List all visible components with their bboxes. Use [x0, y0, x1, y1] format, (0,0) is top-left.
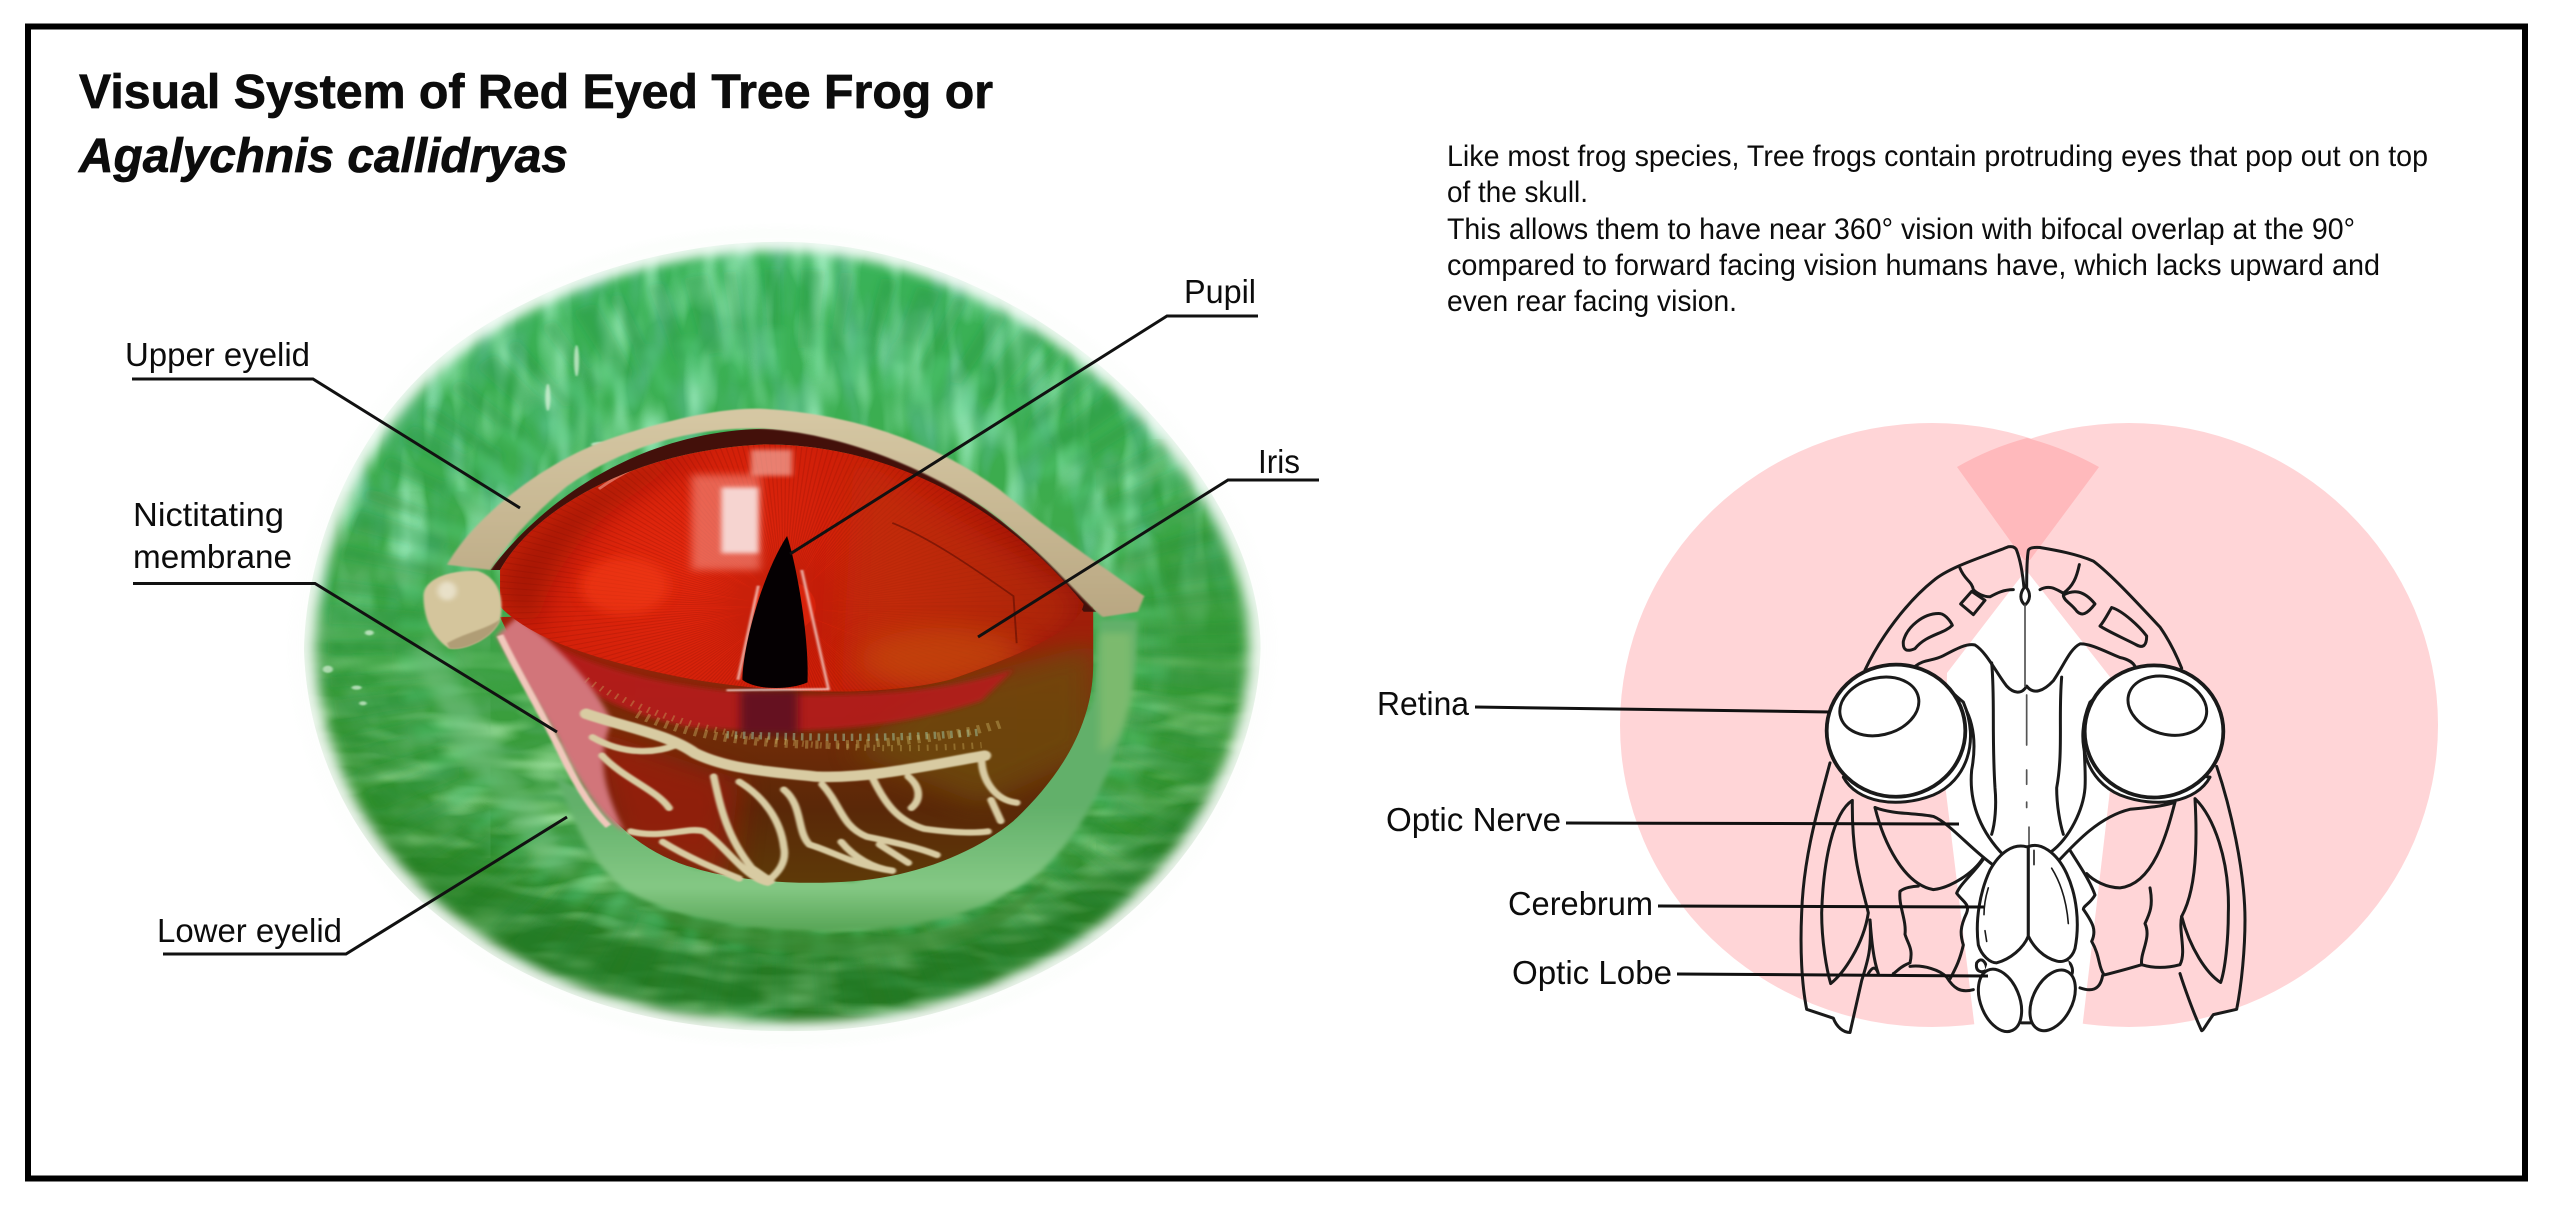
iris	[500, 444, 1084, 692]
feathered edge	[302, 240, 1263, 1033]
retinal veins on membrane	[586, 714, 1017, 883]
description paragraph: Like most frog species, Tree frogs contain protruding eyes that pop out on top	[1447, 140, 2428, 173]
darker lower skin	[372, 778, 1216, 1022]
label: Lower eyelid: Lower eyelid	[157, 912, 342, 949]
left eyeball	[1827, 665, 1971, 802]
frog skull linework	[1801, 547, 2245, 1039]
label: Cerebrum: Cerebrum	[1508, 885, 1653, 922]
binocular overlap cone	[1957, 438, 2099, 560]
nictitating membrane	[497, 617, 624, 831]
field of view: left and right eye	[1620, 423, 2438, 1027]
label: Optic Nerve: Optic Nerve	[1386, 801, 1561, 838]
label: Iris	[978, 443, 1319, 637]
description paragraph: compared to forward facing vision humans have, which lacks upward and	[1447, 249, 2380, 282]
lid corner knob	[424, 571, 502, 649]
label: Pupil	[790, 273, 1258, 554]
lower chamber	[500, 607, 1096, 884]
label: Iris: Iris	[1258, 443, 1300, 480]
illustration: frog eye	[280, 230, 1300, 1050]
label: Nictitating membrane: Nictitating	[133, 496, 284, 533]
soft halo	[299, 234, 1265, 1039]
label: Upper eyelid	[125, 336, 520, 508]
lower eyelid	[554, 620, 1138, 957]
brain: cerebrum	[1976, 845, 2077, 1024]
shadow under upper lid	[490, 429, 1096, 612]
right eyeball	[2083, 665, 2223, 802]
description paragraph: even rear facing vision.	[1447, 285, 1737, 318]
label: Retina: Retina	[1377, 685, 1470, 722]
label: Optic Lobe: Optic Lobe	[1512, 954, 1672, 991]
label: Nictitating membrane: membrane	[133, 538, 292, 575]
description paragraph	[1447, 140, 2428, 318]
brain: optic lobes	[1970, 962, 2085, 1039]
description paragraph: This allows them to have near 360° vision with bifocal overlap at the 90°	[1447, 213, 2355, 246]
label: Lower eyelid	[157, 817, 567, 954]
label: Retina	[1377, 685, 1830, 722]
label: Pupil: Pupil	[1184, 273, 1256, 310]
title: Visual System of Red Eyed Tree Frog or	[79, 66, 993, 119]
upper eyelid	[447, 409, 1144, 617]
label: Nictitating membrane	[133, 496, 557, 732]
visual field diagram	[1620, 423, 2438, 1039]
green skin	[280, 230, 1300, 1050]
label: Upper eyelid: Upper eyelid	[125, 336, 310, 373]
description paragraph: of the skull.	[1447, 176, 1588, 209]
title	[78, 66, 993, 183]
white blind wedge	[1945, 570, 2110, 1030]
title: Agalychnis callidryas	[78, 130, 568, 183]
pupil	[726, 536, 830, 690]
white flecks	[323, 345, 607, 705]
